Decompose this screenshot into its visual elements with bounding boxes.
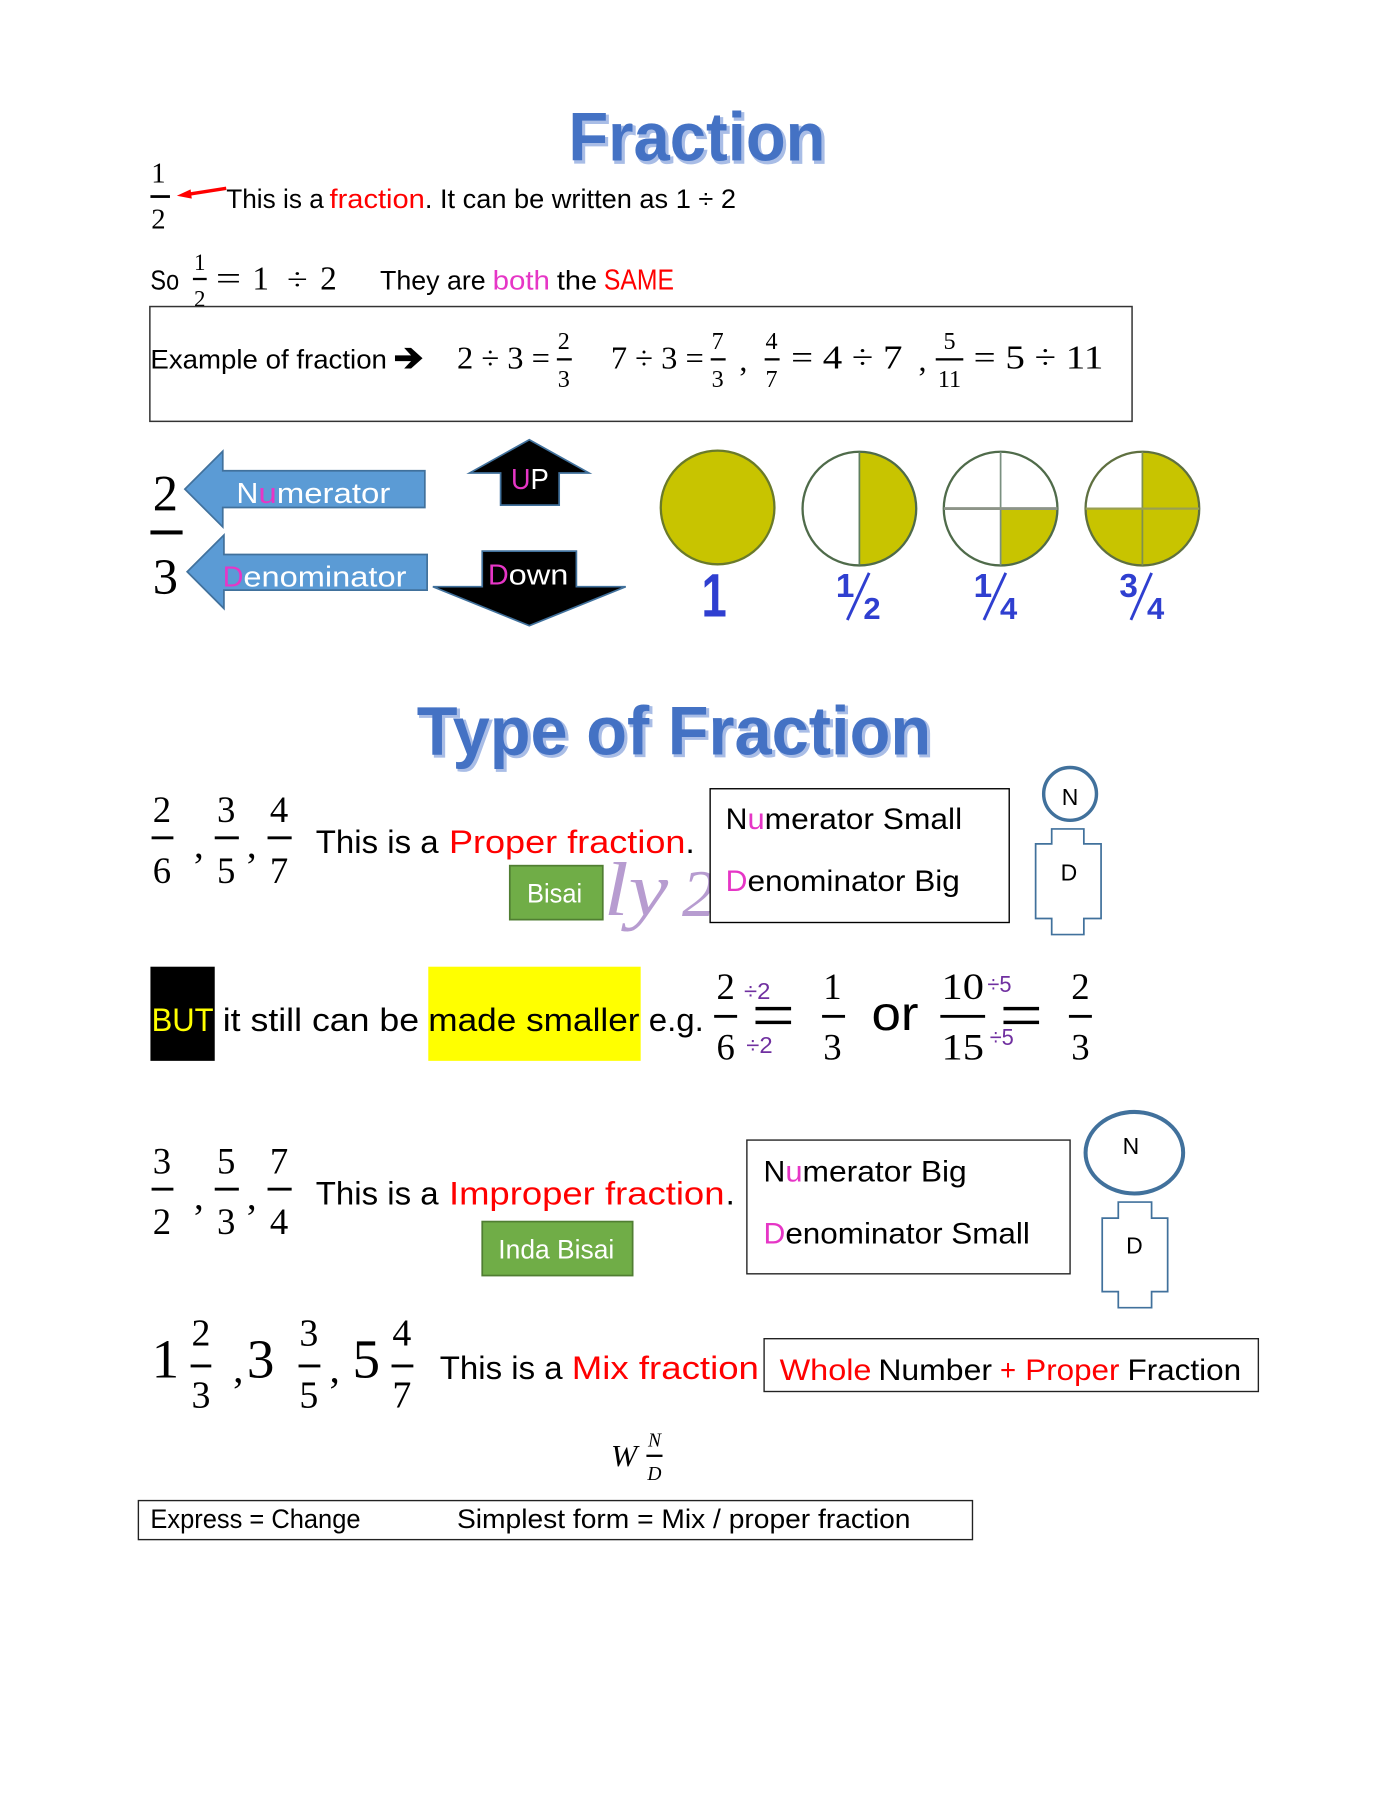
text: this is a fraction: fraction (330, 184, 425, 214)
mixed fractions: , (330, 1345, 340, 1391)
chart: three quarter circle: 4 (1147, 591, 1165, 626)
text: so one half equals one divided by two: = (216, 260, 241, 297)
text: improper fraction: Improper fraction (449, 1174, 724, 1211)
arrow: up: U (511, 464, 530, 496)
title: Fraction: Fraction (571, 101, 828, 178)
panel: numerator big denominator small: merator Big (803, 1155, 967, 1188)
fraction two thirds: 2 (153, 465, 178, 521)
watermark: 2 (682, 858, 715, 931)
text: this is a fraction: . It can be written as 1 ÷ 2 (425, 184, 736, 214)
fraction one half: 1 (151, 158, 166, 190)
improper fractions: 5 (217, 1140, 235, 1181)
arrow: up (470, 440, 589, 505)
equation: two sixths equals one third (714, 966, 845, 1068)
equation: ten fifteenths equals two thirds: ÷5 (987, 971, 1012, 997)
improper fractions: 2 (153, 1201, 171, 1242)
chart: half circle: 1 (836, 568, 854, 605)
equation: five elevenths (936, 329, 1103, 393)
chart: whole circle: 1 (702, 562, 727, 630)
diagram: small N circle (1044, 768, 1096, 820)
panel: numerator big denominator small: u (785, 1155, 803, 1188)
equation: two sixths equals one third: 2 (716, 966, 735, 1007)
text: so one half equals one divided by two: 1 (194, 250, 206, 275)
improper fractions: , (194, 1175, 204, 1218)
formula: W N over D (611, 1431, 662, 1485)
text: example of fraction: Example of fraction (150, 345, 387, 375)
button: Bisai: Bisai (527, 878, 582, 908)
mixed fractions: 4 (392, 1313, 411, 1355)
arrow: denominator (187, 535, 427, 608)
equation: seven divided by three: 7 (712, 329, 724, 355)
mixed fractions (152, 1313, 413, 1417)
arrow: numerator: N (237, 478, 258, 510)
panel: numerator big denominator small: D (764, 1217, 785, 1250)
text: so one half equals one divided by two: SAME (604, 264, 674, 296)
button: Inda Bisai: Inda Bisai (498, 1234, 614, 1264)
panel: numerator small denominator big: enominator Big (747, 865, 960, 898)
arrow: down: own (509, 559, 568, 591)
mixed fractions: 2 (191, 1313, 210, 1355)
chart: three quarter circle (1086, 452, 1199, 626)
arrow: down (433, 551, 626, 626)
proper fractions: , (247, 824, 257, 867)
text: proper fraction: Proper fraction (449, 823, 685, 860)
text: improper fraction (316, 1174, 735, 1211)
diagram: small D shape (1102, 1202, 1168, 1308)
equation: ten fifteenths equals two thirds: 10 (941, 966, 984, 1007)
proper fractions (152, 789, 292, 891)
text: or: or (871, 987, 919, 1041)
panel: numerator small denominator big: D (726, 865, 747, 898)
text: but it still can be made smaller: made smaller (428, 1001, 640, 1038)
arrow: denominator: enominator (243, 562, 407, 594)
text: so one half equals one divided by two: ÷ (287, 261, 308, 296)
equation: four sevenths: , (919, 342, 927, 378)
equation: four sevenths: 4 (766, 329, 778, 355)
text: but it still can be made smaller: it still can be (223, 1001, 419, 1038)
equation: ten fifteenths equals two thirds: ÷5 (990, 1024, 1014, 1050)
chart: quarter circle (944, 452, 1057, 626)
proper fractions: 3 (217, 789, 235, 830)
title: Fraction: Fraction (568, 99, 826, 176)
heading: Type of Fraction: Type of Fraction (419, 695, 933, 772)
mixed fractions: 3 (299, 1313, 318, 1355)
panel: whole number plus proper fraction: Whole (780, 1354, 871, 1387)
text: so one half equals one divided by two: 2 (320, 260, 337, 297)
proper fractions: 5 (217, 850, 235, 891)
watermark (604, 848, 715, 932)
equation: seven divided by three (611, 329, 747, 393)
improper fractions (152, 1140, 292, 1242)
text: so one half equals one divided by two: both (493, 265, 550, 295)
equation: two divided by three: 2 (558, 329, 570, 355)
watermark: ly (604, 848, 669, 932)
proper fractions: 7 (270, 850, 288, 891)
diagram: big D shape: D (1061, 860, 1077, 886)
arrow: denominator: D (223, 562, 243, 594)
panel: numerator big denominator small: enominator Small (785, 1217, 1030, 1250)
text: this is a fraction: This is a (226, 184, 324, 214)
equation: two divided by three: 2 ÷ 3 = (457, 340, 550, 376)
equation: seven divided by three: , (739, 342, 747, 378)
text: so one half equals one divided by two: So (150, 264, 179, 295)
text: mix fraction: Mix fraction (572, 1349, 759, 1386)
improper fractions: 3 (217, 1201, 235, 1242)
equation: ten fifteenths equals two thirds: 3 (1071, 1027, 1090, 1068)
fraction one half: 2 (151, 203, 166, 235)
diagram: small N circle: N (1062, 784, 1078, 810)
equation: two divided by three (457, 329, 572, 393)
proper fractions: 6 (153, 850, 171, 891)
equation: ten fifteenths equals two thirds: 15 (941, 1027, 984, 1068)
text: so one half equals one divided by two: the (557, 265, 597, 295)
chart: quarter circle: 1 (974, 568, 992, 605)
chart: half circle (803, 452, 916, 626)
heading: Type of Fraction: Type of Fraction (417, 692, 931, 769)
arrow: up: P (530, 464, 549, 496)
improper fractions: 4 (270, 1201, 288, 1242)
equation: two sixths equals one third: ÷2 (744, 978, 770, 1004)
formula: W N over D: N (647, 1431, 662, 1452)
text: so one half equals one divided by two: They are (380, 265, 486, 295)
panel: numerator small denominator big: u (747, 803, 765, 836)
arrow: numerator (185, 451, 425, 527)
equation: four sevenths: = 4 ÷ 7 (791, 340, 902, 377)
equation: two sixths equals one third: 1 (823, 966, 842, 1007)
diagram: big D shape (1036, 829, 1101, 935)
equation: two sixths equals one third: 3 (823, 1027, 842, 1068)
text: but it still can be made smaller: BUT (152, 1001, 214, 1038)
panel: whole number plus proper fraction: + (1000, 1354, 1016, 1387)
panel: whole number plus proper fraction: Number (878, 1354, 992, 1387)
equation: seven divided by three: 7 ÷ 3 = (611, 340, 704, 376)
panel: numerator small denominator big: N (726, 803, 747, 836)
mixed fractions: , (233, 1345, 243, 1391)
improper fractions: , (247, 1175, 257, 1218)
text: proper fraction (316, 823, 695, 860)
panel: numerator big denominator small (747, 1140, 1070, 1274)
chart: half circle: 2 (863, 591, 881, 626)
text: this is a fraction (226, 184, 736, 214)
arrow: pointing to fraction (177, 188, 226, 199)
chart: whole circle (661, 451, 774, 630)
text: so one half equals one divided by two: 1 (252, 260, 269, 297)
equation: two divided by three: 3 (558, 367, 570, 393)
text: improper fraction: . (726, 1174, 735, 1211)
fraction two thirds (150, 465, 183, 605)
diagram: small D shape: D (1126, 1233, 1143, 1259)
panel: example of fraction (150, 307, 1132, 421)
panel: definitions (138, 1501, 972, 1540)
text: but it still can be made smaller (150, 967, 704, 1061)
mixed fractions: 3 (191, 1375, 210, 1417)
mixed fractions: 1 (152, 1329, 179, 1390)
text: so one half equals one divided by two (150, 250, 674, 312)
improper fractions: 3 (153, 1140, 171, 1181)
panel: whole number plus proper fraction: Fraction (1127, 1354, 1241, 1387)
panel: definitions: Express = Change (150, 1504, 361, 1534)
button: Inda Bisai (482, 1222, 633, 1276)
text: improper fraction: This is a (316, 1174, 439, 1211)
equation: four sevenths: 7 (766, 367, 778, 393)
equation: four sevenths (765, 329, 927, 393)
equation: five elevenths: 11 (938, 367, 961, 393)
panel: numerator small denominator big: merator Small (765, 803, 962, 836)
icon: right arrow (395, 348, 423, 369)
text: mix fraction (440, 1349, 759, 1386)
chart: three quarter circle: 3 (1119, 568, 1138, 605)
panel: numerator big denominator small: N (764, 1155, 785, 1188)
panel: definitions: Simplest form = Mix / proper fraction (457, 1504, 910, 1534)
chart: quarter circle: 4 (1000, 591, 1018, 626)
proper fractions: 4 (270, 789, 288, 830)
formula: W N over D: W (611, 1438, 640, 1473)
arrow: numerator: merator (277, 478, 391, 510)
text: so one half equals one divided by two: 2 (194, 287, 206, 312)
equation: two sixths equals one third: 6 (716, 1027, 735, 1068)
mixed fractions: 5 (299, 1375, 318, 1417)
arrow: down: D (488, 559, 509, 591)
text: proper fraction: This is a (316, 823, 439, 860)
text: mix fraction: This is a (440, 1349, 563, 1386)
equation: ten fifteenths equals two thirds (940, 966, 1092, 1068)
improper fractions: 7 (270, 1140, 288, 1181)
proper fractions: 2 (153, 789, 171, 830)
panel: numerator small denominator big (710, 789, 1009, 923)
panel: whole number plus proper fraction (764, 1339, 1258, 1392)
arrow: numerator: u (258, 478, 277, 510)
text: but it still can be made smaller: e.g. (649, 1001, 704, 1038)
panel: whole number plus proper fraction: Proper (1025, 1354, 1119, 1387)
equation: ten fifteenths equals two thirds: 2 (1071, 966, 1090, 1007)
equation: two sixths equals one third: ÷2 (746, 1032, 773, 1058)
mixed fractions: 7 (392, 1375, 411, 1417)
equation: five elevenths: = 5 ÷ 11 (974, 340, 1103, 377)
equation: seven divided by three: 3 (712, 367, 724, 393)
text: proper fraction: . (685, 823, 695, 860)
equation: five elevenths: 5 (943, 329, 956, 355)
mixed fractions: 5 (353, 1329, 380, 1390)
diagram: big N circle: N (1123, 1133, 1139, 1159)
formula: W N over D: D (646, 1464, 662, 1485)
fraction one half (150, 158, 170, 235)
proper fractions: , (194, 824, 204, 867)
button: Bisai (510, 866, 603, 920)
diagram: big N circle (1086, 1112, 1183, 1193)
fraction two thirds: 3 (153, 549, 178, 605)
mixed fractions: 3 (247, 1329, 274, 1390)
